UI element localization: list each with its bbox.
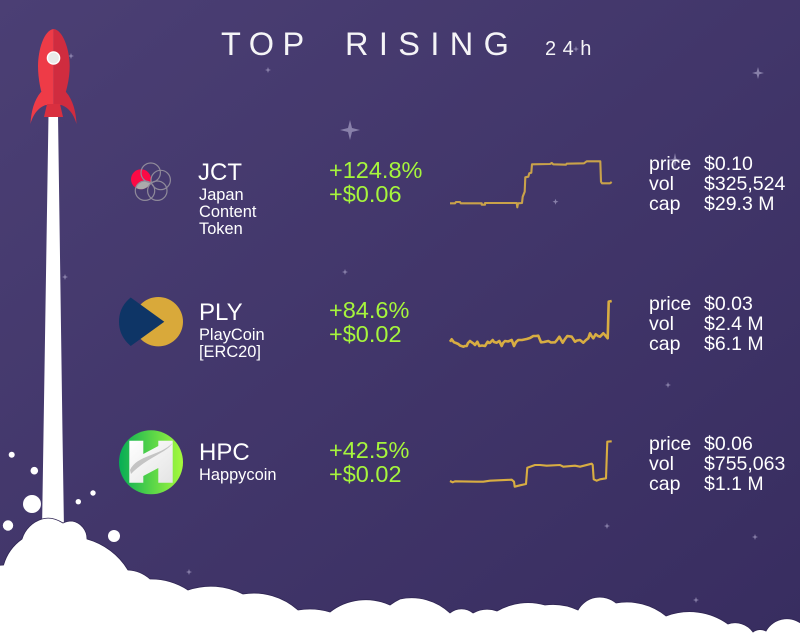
HPC chart xyxy=(450,441,612,487)
JCT change: +$0.06 xyxy=(329,181,402,207)
HPC stats xyxy=(649,433,785,495)
JCT stats: cap xyxy=(649,193,681,215)
HPC name: Happycoin xyxy=(199,466,276,484)
PLY stats xyxy=(649,293,764,355)
row: JCT xyxy=(131,153,785,238)
PLY change: +84.6% xyxy=(329,297,409,323)
PLY stats: price xyxy=(649,293,691,315)
JCT stats: $29.3 M xyxy=(704,193,774,215)
PLY name: [ERC20] xyxy=(199,343,261,361)
JCT name: Content xyxy=(199,203,257,221)
JCT stats: price xyxy=(649,153,691,175)
JCT chart xyxy=(450,161,612,207)
HPC stats: cap xyxy=(649,473,681,495)
PLY name: PlayCoin xyxy=(199,326,265,344)
JCT change: +124.8% xyxy=(329,157,423,183)
HPC name xyxy=(199,439,276,484)
HPC change: +42.5% xyxy=(329,437,409,463)
PLY name xyxy=(199,299,265,361)
HPC name: HPC xyxy=(199,439,250,466)
PLY stats: vol xyxy=(649,313,674,335)
PLY change: +$0.02 xyxy=(329,321,402,347)
rocket xyxy=(30,29,76,124)
HPC stats: $755,063 xyxy=(704,453,785,475)
bubbles xyxy=(3,452,120,542)
PLY stats: $0.03 xyxy=(704,293,753,315)
stars xyxy=(62,46,764,603)
rocket exhaust trail xyxy=(42,115,64,530)
row: HPC xyxy=(119,430,785,495)
JCT name: Token xyxy=(199,220,243,238)
clouds xyxy=(0,518,800,634)
HPC stats: vol xyxy=(649,453,674,475)
PLY stats: cap xyxy=(649,333,681,355)
JCT change xyxy=(329,157,423,207)
PLY name: PLY xyxy=(199,299,243,326)
icon: HPC logo xyxy=(119,430,183,494)
JCT stats: $325,524 xyxy=(704,173,785,195)
icon: JCT logo xyxy=(131,163,170,200)
title: RISING xyxy=(345,26,519,62)
JCT stats: $0.10 xyxy=(704,153,753,175)
JCT name: JCT xyxy=(198,159,242,186)
row: PLY xyxy=(119,293,764,361)
PLY stats: $2.4 M xyxy=(704,313,764,335)
JCT stats xyxy=(649,153,785,215)
JCT stats: vol xyxy=(649,173,674,195)
title: TOP xyxy=(221,26,313,62)
HPC change: +$0.02 xyxy=(329,461,402,487)
HPC stats: $1.1 M xyxy=(704,473,764,495)
HPC change xyxy=(329,437,409,487)
title xyxy=(221,26,598,62)
PLY stats: $6.1 M xyxy=(704,333,764,355)
HPC stats: $0.06 xyxy=(704,433,753,455)
PLY change xyxy=(329,297,409,347)
PLY chart xyxy=(450,301,612,347)
JCT name: Japan xyxy=(199,186,244,204)
JCT name xyxy=(198,159,257,238)
HPC stats: price xyxy=(649,433,691,455)
icon: PLY logo xyxy=(119,297,183,346)
title: 24h xyxy=(545,38,598,60)
